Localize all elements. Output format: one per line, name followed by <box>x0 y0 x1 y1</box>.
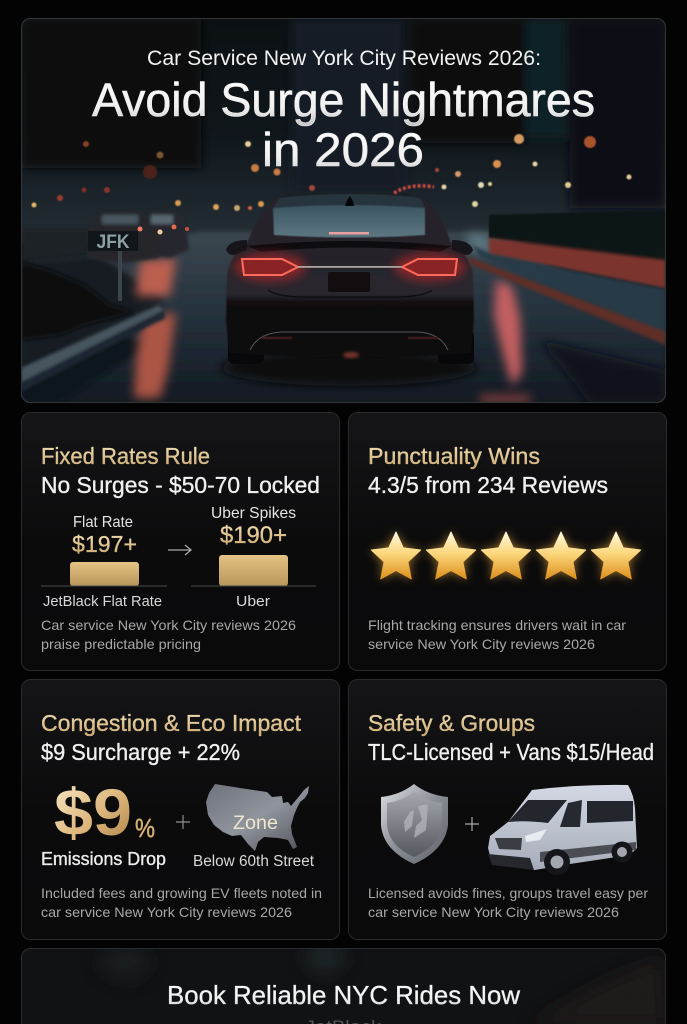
uber bar: Uber <box>236 593 270 610</box>
icon: US map with zone label: Below 60th Street <box>193 853 315 870</box>
main headline: Avoid Surge Nightmares <box>92 73 595 126</box>
caption: Licensed avoids fines, groups travel easy per <box>368 885 648 901</box>
brake light <box>329 232 369 234</box>
tail lights <box>234 253 306 281</box>
call to action heading: Book Reliable NYC Rides Now <box>167 980 520 1010</box>
shark fin <box>345 196 354 206</box>
big stat: $9 %: $9 <box>54 775 132 849</box>
subheading: $9 Surcharge + 22% <box>41 739 240 765</box>
panel: fixed rates rule <box>22 412 340 670</box>
panel: congestion and eco impact <box>22 680 340 940</box>
road reflection under car <box>343 352 359 358</box>
flat rate bar <box>41 514 167 610</box>
road surface <box>21 232 666 403</box>
panel: safety and groups <box>348 680 666 940</box>
caption: praise predictable pricing <box>41 636 201 652</box>
mirrors <box>226 240 247 255</box>
bar chart: price comparison <box>41 505 316 610</box>
title <box>92 47 595 176</box>
bumper trim <box>250 332 448 350</box>
icon: shield <box>381 784 448 864</box>
deck lip <box>247 241 451 252</box>
panel: call to action <box>21 943 666 1024</box>
right red barrier <box>489 238 666 289</box>
flat rate bar: Flat Rate <box>73 514 133 531</box>
left kerb area and wall <box>22 228 88 260</box>
car body <box>226 194 474 358</box>
caption: Flight tracking ensures drivers wait in car <box>368 617 626 633</box>
panel: hero photo of car on a rainy road <box>21 18 666 403</box>
subheading: No Surges - $50-70 Locked <box>41 472 320 498</box>
star rating <box>371 532 641 579</box>
JFK road sign: JFK <box>96 232 130 253</box>
caption: car service New York City reviews 2026 <box>41 904 292 920</box>
big stat: $9 %: Emissions Drop <box>41 848 166 869</box>
subheading: 4.3/5 from 234 Reviews <box>368 472 608 498</box>
icon: passenger van <box>488 785 637 875</box>
big stat: $9 %: % <box>135 813 155 843</box>
heading: Congestion & Eco Impact <box>41 710 302 736</box>
main headline <box>92 73 595 176</box>
roof <box>273 194 425 208</box>
right red curb <box>468 257 666 345</box>
JFK road sign <box>88 231 138 301</box>
right fence <box>488 210 665 243</box>
caption <box>368 885 648 920</box>
subheading: TLC-Licensed + Vans $15/Head <box>368 739 654 765</box>
caption <box>41 617 296 652</box>
caption: car service New York City reviews 2026 <box>368 904 619 920</box>
distant cars <box>88 210 189 264</box>
plus sign <box>176 815 190 829</box>
road reflections and wet patches <box>134 233 666 403</box>
licence plate <box>328 272 370 292</box>
caption: Included fees and growing EV fleets noted in <box>41 885 322 901</box>
icon: US map with zone label <box>193 784 315 870</box>
right sidewalk <box>472 245 666 336</box>
plus sign <box>465 817 479 831</box>
panel crease <box>268 290 432 297</box>
uber bar: Uber Spikes <box>211 505 296 522</box>
uber bar: $190+ <box>220 522 287 549</box>
flat rate bar: $197+ <box>72 531 137 557</box>
left curb <box>21 306 165 392</box>
caption <box>41 885 322 920</box>
big stat: $9 % <box>41 775 166 869</box>
flat rate bar: JetBlack Flat Rate <box>43 593 162 610</box>
icon: US map with zone label: Zone <box>233 812 278 834</box>
caption: service New York City reviews 2026 <box>368 636 595 652</box>
heading: Fixed Rates Rule <box>41 443 210 469</box>
subtitle line: Car Service New York City Reviews 2026: <box>147 47 541 70</box>
bokeh lights <box>32 134 632 211</box>
caption: Car service New York City reviews 2026 <box>41 617 296 633</box>
heading: Safety & Groups <box>368 710 535 736</box>
main headline: in 2026 <box>262 123 424 176</box>
heading: Punctuality Wins <box>368 443 540 469</box>
uber bar <box>191 505 316 610</box>
panel: punctuality wins <box>348 412 666 670</box>
arrow <box>168 545 191 555</box>
rear window <box>273 205 425 238</box>
caption <box>368 617 626 652</box>
car rear view <box>221 194 477 386</box>
bushes <box>21 262 135 340</box>
